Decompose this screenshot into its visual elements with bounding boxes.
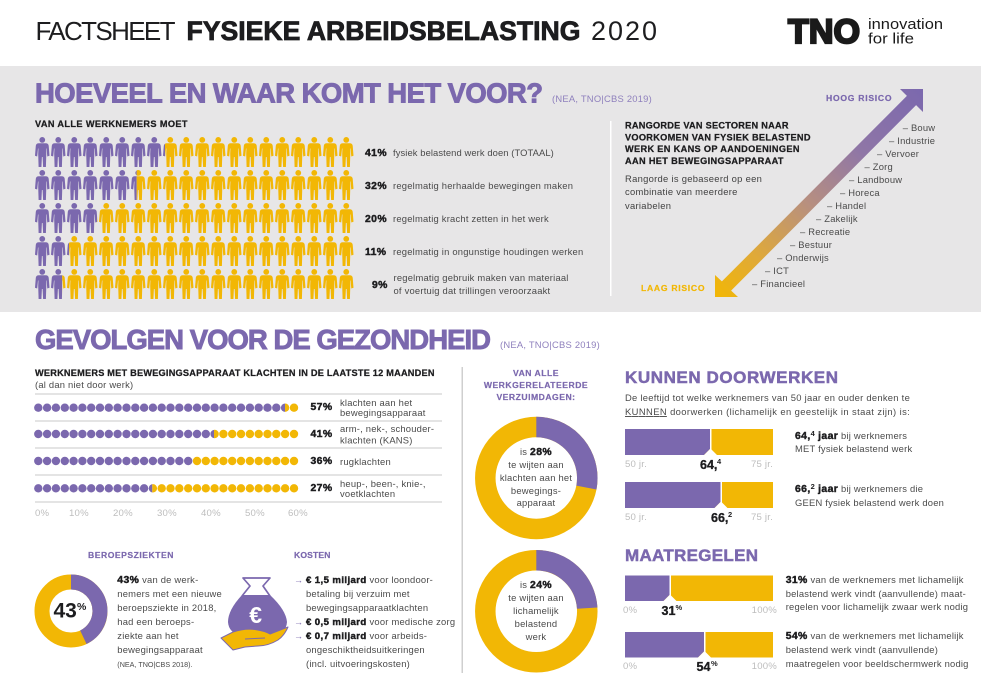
bar: 64,4 jaar — [625, 429, 773, 472]
sector list: – Recreatie — [800, 226, 850, 237]
pictogram labels — [365, 147, 583, 296]
text: beroepsziekten: 43% van de werk- — [117, 574, 198, 586]
dot chart labels: 41% — [310, 429, 332, 440]
intro text: KUNNEN doorwerken (lichamelijk en geestelijk in staat zijn) is: — [625, 406, 910, 417]
title: FYSIEKE ARBEIDSBELASTING — [186, 16, 580, 46]
text: kosten list — [294, 574, 455, 669]
sector list: – Zorg — [864, 161, 893, 172]
bar: 54 percent: 54 — [696, 660, 710, 674]
bar: 66,2 jaar: 66, — [711, 511, 728, 525]
pictogram labels: 11% — [365, 247, 386, 258]
text: 64,4 jaar: 64, — [795, 431, 811, 442]
bar: 66,2 jaar: 75 jr. — [751, 512, 773, 523]
donut: 28 percent: bewegings- — [511, 485, 561, 496]
axis labels: 10% — [69, 508, 89, 519]
bar: 66,2 jaar: 50 jr. — [625, 512, 647, 523]
pictogram labels: 41% — [365, 148, 387, 159]
bar: 31 percent — [623, 576, 777, 618]
dot chart labels: 36% — [310, 456, 332, 467]
dot chart labels: voetklachten — [340, 488, 395, 499]
text: kosten list: € 1,5 miljard voor loondoor- — [306, 574, 433, 586]
label: hoog risico: HOOG RISICO — [826, 93, 892, 103]
donut: 28 percent: te wijten aan — [508, 459, 564, 470]
sector list: – Landbouw — [849, 174, 902, 185]
divider — [462, 367, 463, 673]
dot chart labels: heup-, been-, knie-, — [340, 478, 426, 489]
sector list — [752, 122, 935, 289]
dot chart labels: 57% — [310, 402, 332, 413]
sector list: – Industrie — [889, 135, 935, 146]
text: 31 percent: 31% van de werknemers met lichamelijk — [786, 574, 964, 586]
label: laag risico: LAAG RISICO — [641, 283, 705, 293]
text: rangorde van sectoren: AAN HET BEWEGINGSAPPARAAT — [625, 156, 784, 166]
donut: 24 percent: lichamelijk — [513, 605, 559, 616]
title: FACTSHEET — [36, 16, 176, 46]
title: 2020 — [591, 16, 657, 46]
heading: hoeveel en waar komt het voor: HOEVEEL EN WAAR KOMT HET VOOR? — [35, 78, 543, 108]
divider — [610, 121, 612, 296]
text: kosten list: ongeschiktheidsuitkeringen — [306, 644, 425, 655]
text: beroepsziekten: nemers met een nieuwe — [117, 588, 222, 599]
pictogram labels: 20% — [365, 214, 387, 225]
text: 66,2 jaar — [795, 482, 944, 508]
icon: money bag with hand — [221, 578, 288, 650]
text: 31 percent: regelen voor lichamelijk zwaar werk nodig — [786, 601, 968, 612]
dot chart — [34, 394, 442, 502]
text: rangorde van sectoren: combinatie van meerdere — [625, 186, 738, 197]
text: rangorde van sectoren: Rangorde is gebaseerd op een — [625, 173, 762, 184]
bar: 54 percent: % — [711, 659, 718, 668]
sector list: – ICT — [765, 265, 789, 276]
text: rangorde van sectoren: variabelen — [625, 200, 671, 211]
text: 64,4 jaar: jaar — [815, 431, 838, 442]
text: kosten list: € 0,7 miljard voor arbeids- — [306, 630, 427, 642]
donut: 28 percent: apparaat — [517, 497, 556, 508]
heading: kunnen doorwerken: KUNNEN DOORWERKEN — [625, 368, 838, 387]
source note: (NEA, TNO|CBS 2019) — [552, 93, 652, 104]
panel: kosten — [221, 550, 455, 669]
text: 31 percent — [786, 574, 968, 612]
dot chart labels: klachten aan het — [340, 397, 412, 408]
panel: kunnen doorwerken — [625, 368, 944, 525]
bar: 66,2 jaar: 2 — [728, 510, 732, 519]
intro text: De leeftijd tot welke werknemers van 50 jaar en ouder denken te — [625, 392, 910, 403]
axis labels: 30% — [157, 508, 177, 519]
text: 54 percent — [786, 630, 969, 669]
axis labels: 0% — [35, 508, 50, 519]
pictogram labels: regelmatig herhaalde bewegingen maken — [393, 180, 573, 191]
bar: 31 percent: 31 — [662, 604, 675, 618]
pictogram labels: regelmatig gebruik maken van materiaal — [394, 272, 569, 283]
logo: TNO innovation for life: TNO — [788, 13, 860, 51]
donut: 24 percent: belastend — [515, 618, 557, 629]
dot chart labels: bewegingsapparaat — [340, 407, 426, 418]
subnote: (al dan niet door werk) — [35, 379, 133, 390]
panel: hoeveel en waar — [0, 66, 981, 312]
bar: 66,2 jaar — [625, 482, 773, 525]
subheading: van alle werknemers moet: VAN ALLE WERKNEMERS MOET — [35, 119, 188, 129]
pictogram labels: of voertuig dat trillingen veroorzaakt — [394, 285, 551, 296]
logo: TNO innovation for life: for life — [868, 30, 914, 48]
axis labels — [35, 508, 308, 519]
bar: 64,4 jaar: 4 — [717, 457, 722, 466]
text: kosten list: → — [294, 617, 303, 627]
heading: maatregelen: MAATREGELEN — [625, 546, 758, 565]
text: rangorde van sectoren: RANGORDE VAN SECTOREN NAAR — [625, 120, 789, 130]
text: kosten list: → — [294, 631, 303, 641]
text: kosten list: bewegingsapparaatklachten — [306, 602, 428, 613]
donut: 24 percent — [485, 560, 587, 662]
text: 64,4 jaar — [795, 429, 912, 454]
pictogram labels: fysiek belastend werk doen (TOTAAL) — [393, 147, 554, 158]
text: rangorde van sectoren: WERK EN KANS OP AANDOENINGEN — [625, 144, 800, 154]
axis labels: 50% — [245, 508, 265, 519]
text: 66,2 jaar: 2 — [811, 482, 815, 491]
title — [36, 16, 657, 46]
text: rangorde van sectoren: VOORKOMEN VAN FYSIEK BELASTEND — [625, 132, 811, 142]
dot chart labels: rugklachten — [340, 456, 391, 467]
dot chart labels: 27% — [310, 483, 332, 494]
donut: 28 percent — [485, 427, 587, 529]
panel: beroepsziekten — [42, 550, 222, 669]
bar: 31 percent: 100% — [752, 605, 777, 616]
donut: 43 percent: 43 — [54, 600, 77, 622]
bar: 54 percent: 100% — [752, 661, 777, 672]
text: beroepsziekten: had een beroeps- — [117, 616, 194, 627]
arrow: risico — [715, 89, 923, 297]
text: 54 percent: 54% van de werknemers met lichamelijk — [786, 630, 964, 642]
donut: 24 percent: is 24% — [520, 579, 552, 591]
axis labels: 40% — [201, 508, 221, 519]
sector list: – Vervoer — [877, 148, 919, 159]
icon: money bag with hand: € — [249, 602, 262, 628]
heading: van alle werkgerelateerde verzuimdagen: VAN ALLE — [513, 368, 559, 378]
heading: van alle werkgerelateerde verzuimdagen — [484, 368, 588, 402]
axis labels: 20% — [113, 508, 133, 519]
text: 66,2 jaar: GEEN fysiek belastend werk doen — [795, 497, 944, 508]
text: 66,2 jaar: jaar — [815, 484, 838, 495]
sector list: – Handel — [827, 200, 866, 211]
sector list: – Bouw — [903, 122, 935, 133]
donut: 43 percent: % — [77, 601, 87, 613]
sector list: – Financieel — [752, 278, 805, 289]
panel: maatregelen — [623, 546, 969, 674]
source note: (NEA, TNO|CBS 2019) — [500, 339, 600, 350]
text: 54 percent: belastend werk vindt (aanvullende) — [786, 644, 938, 655]
intro text — [625, 392, 910, 417]
donut: 24 percent: werk — [525, 631, 546, 642]
sector list: – Horeca — [840, 187, 880, 198]
heading: beroepsziekten: BEROEPSZIEKTEN — [88, 550, 174, 560]
pictogram chart: werknemers — [35, 137, 354, 299]
text: beroepsziekten: bewegingsapparaat — [117, 644, 203, 655]
text: kosten list: € 0,5 miljard voor medische zorg — [306, 616, 455, 628]
text: beroepsziekten: (NEA, TNO|CBS 2018). — [117, 660, 193, 669]
pictogram labels: 32% — [365, 181, 387, 192]
dot chart labels — [310, 397, 434, 499]
heading: van alle werkgerelateerde verzuimdagen: VERZUIMDAGEN: — [496, 392, 576, 402]
text: beroepsziekten: beroepsziekte in 2018, — [117, 602, 216, 613]
heading: kosten: KOSTEN — [294, 550, 331, 560]
text: 66,2 jaar: bij werknemers die — [838, 483, 923, 494]
text: 64,4 jaar: MET fysiek belastend werk — [795, 443, 912, 454]
dot chart labels: arm-, nek-, schouder- — [340, 423, 434, 434]
pictogram labels: regelmatig kracht zetten in het werk — [393, 213, 549, 224]
bar: 54 percent: 0% — [623, 661, 638, 672]
text: kosten list: (incl. uitvoeringskosten) — [306, 658, 410, 669]
heading: van alle werkgerelateerde verzuimdagen: WERKGERELATEERDE — [484, 380, 588, 390]
text: 54 percent: maatregelen voor beeldschermwerk nodig — [786, 658, 969, 669]
panel: verzuimdagen — [484, 368, 588, 662]
logo: TNO innovation for life — [788, 13, 943, 51]
logo: TNO innovation for life: innovation — [868, 16, 943, 33]
dot chart labels: klachten (KANS) — [340, 434, 413, 446]
text: rangorde van sectoren — [625, 120, 811, 211]
bar: 64,4 jaar: 75 jr. — [751, 459, 773, 470]
donut: 28 percent: is 28% — [520, 446, 552, 458]
axis labels: 60% — [288, 508, 308, 519]
pictogram labels: regelmatig in ongunstige houdingen werken — [393, 246, 583, 257]
heading: gevolgen voor de gezondheid: GEVOLGEN VOOR DE GEZONDHEID — [35, 324, 491, 355]
text: 64,4 jaar: 4 — [811, 429, 816, 438]
text: 64,4 jaar: bij werknemers — [838, 430, 907, 441]
pictogram labels: 9% — [372, 280, 388, 291]
panel: klachten — [34, 368, 442, 519]
text: kosten list: betaling bij verzuim met — [306, 588, 410, 599]
sector list: – Onderwijs — [777, 252, 829, 263]
subheading: werknemers met klachten: WERKNEMERS MET BEWEGINGSAPPARAAT KLACHTEN IN DE LAATSTE 12 MAANDEN — [35, 368, 435, 378]
bar: 64,4 jaar: 50 jr. — [625, 459, 647, 470]
text: 31 percent: belastend werk vindt (aanvullende) maat- — [786, 588, 966, 599]
bar: 31 percent: % — [676, 603, 682, 612]
donut: 28 percent: klachten aan het — [500, 472, 572, 483]
sector list: – Zakelijk — [816, 213, 858, 224]
text: beroepsziekten: ziekte aan het — [117, 630, 179, 641]
bar: 31 percent: 0% — [623, 605, 638, 616]
bar: 54 percent — [623, 632, 777, 674]
text: kosten list: → — [294, 575, 303, 585]
bar: 64,4 jaar: 64, — [700, 458, 717, 472]
text: beroepsziekten — [117, 574, 222, 669]
donut: 43 percent — [42, 582, 100, 640]
sector list: – Bestuur — [790, 239, 832, 250]
text: 66,2 jaar: 66, — [795, 484, 811, 495]
donut: 24 percent: te wijten aan — [508, 592, 564, 603]
